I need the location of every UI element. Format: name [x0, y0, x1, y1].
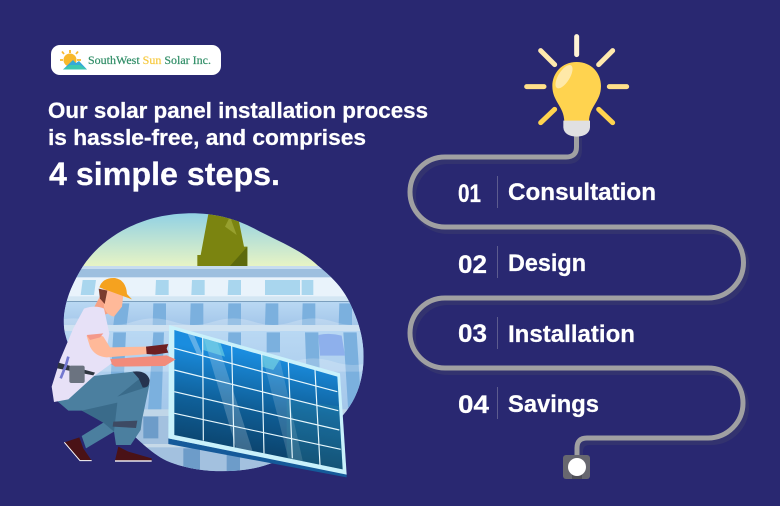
face	[103, 288, 123, 317]
illustration: worker installing solar panel	[52, 210, 373, 479]
icon: light bulb	[527, 37, 627, 137]
step 01: 01	[458, 180, 481, 208]
plug socket	[563, 455, 590, 479]
logo wordmark: SouthWest Sun Solar Inc.	[88, 53, 211, 67]
heading: Our solar panel installation process	[48, 98, 428, 123]
tool belt	[57, 363, 95, 375]
hair	[99, 289, 107, 304]
glove	[146, 344, 168, 355]
far arm	[105, 355, 176, 367]
step 01: Consultation	[508, 179, 656, 206]
step 01	[458, 176, 656, 208]
wire path shadow	[413, 138, 746, 456]
solar panel	[168, 325, 347, 477]
winding wire	[410, 135, 743, 458]
bulb glass	[552, 62, 601, 122]
helmet	[99, 278, 132, 299]
rays	[527, 37, 627, 123]
icon: sun and mountains	[60, 50, 87, 70]
step 02	[458, 246, 586, 279]
sleeve edge	[87, 333, 103, 340]
heading	[48, 98, 428, 192]
knee pad	[133, 371, 150, 387]
bulb base	[563, 121, 590, 137]
bulb highlight	[552, 62, 576, 91]
rooftop scene in blob	[53, 210, 373, 479]
step 03	[458, 317, 635, 349]
shirt	[52, 307, 112, 402]
step 02: Design	[508, 250, 586, 277]
logo badge	[51, 45, 221, 75]
step 02: 02	[458, 251, 487, 279]
near arm	[87, 334, 148, 357]
step 04: Savings	[508, 391, 599, 418]
step 04: 04	[458, 391, 489, 419]
step 03: Installation	[508, 321, 635, 348]
trousers	[56, 372, 149, 448]
boots	[64, 437, 92, 461]
infographic canvas	[48, 34, 750, 479]
heading: 4 simple steps.	[49, 156, 280, 192]
heading: is hassle-free, and comprises	[48, 125, 366, 150]
neck	[93, 295, 108, 315]
icon: wrench	[61, 357, 68, 378]
step 04	[458, 387, 599, 419]
step 03: 03	[458, 320, 487, 348]
worker	[52, 278, 176, 462]
